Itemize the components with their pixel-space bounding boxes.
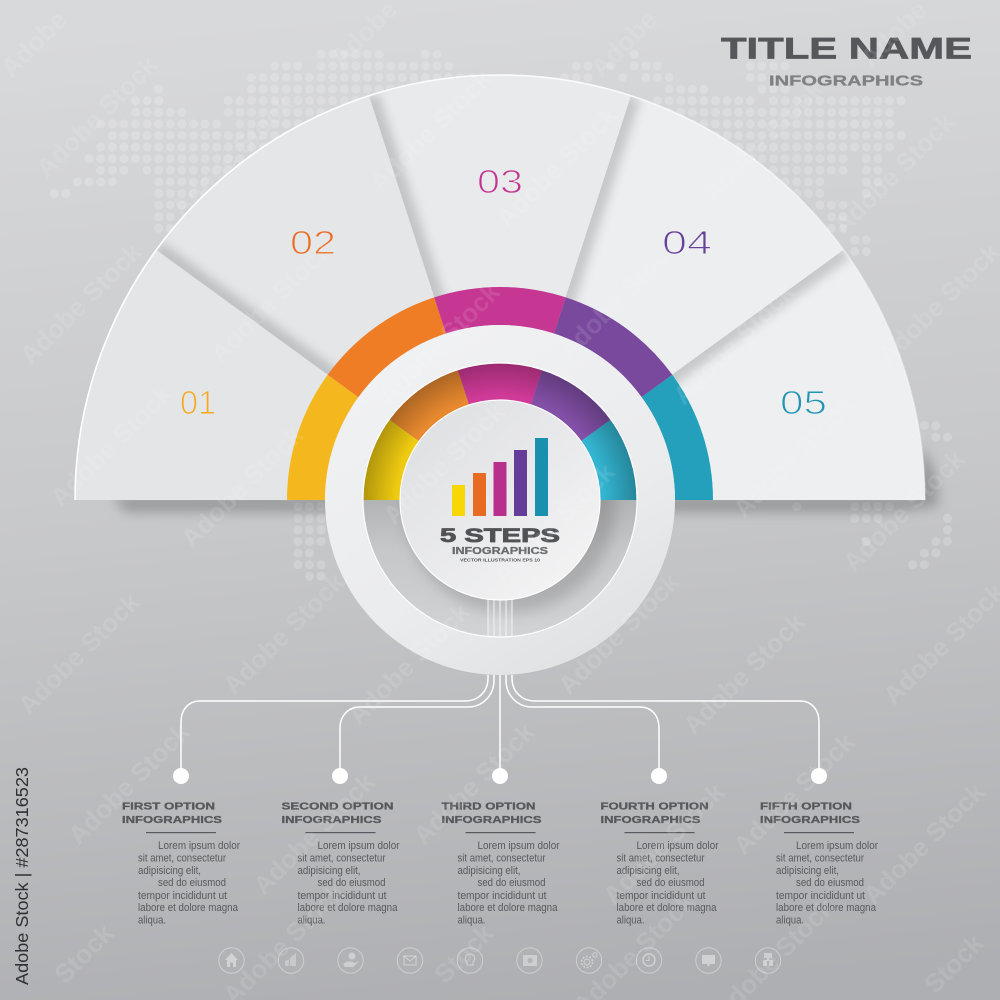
option 5: INFOGRAPHICS [760,815,861,826]
option 5: sed do eiusmod [796,877,864,889]
icon: home [225,953,238,967]
watermark: Adobe Stock [14,236,148,370]
watermark: Adobe Stock [857,776,991,910]
option 2: labore et dolore magna [298,902,398,914]
sector 4 [500,96,844,500]
centre disc [400,400,600,600]
watermark: Adobe Stock [44,378,178,512]
watermark: Adobe Stock [487,456,621,590]
step number 05: 05 [780,384,827,421]
title [721,32,972,90]
centre heading: VECTOR ILLUSTRATION EPS 10 [460,558,540,564]
watermark: Adobe Stock [175,419,309,553]
option 2: INFOGRAPHICS [282,815,382,826]
option 5: tempor incididunt ut [776,890,866,902]
watermark: Adobe Stock [217,566,351,700]
option 5: aliqua. [776,914,804,926]
watermark: Adobe Stock [552,566,686,700]
option 3: INFOGRAPHICS [442,815,542,826]
step number 01: 01 [180,384,216,421]
watermark: Adobe [584,4,663,83]
sector 2 [156,96,500,500]
watermark: Adobe Stock [165,88,299,222]
watermark: Adobe Stock [377,396,511,530]
watermark: Adobe Stock [597,776,731,910]
inner colour ring [363,363,637,500]
option 1: aliqua. [138,914,166,926]
bar chart icon [452,438,548,516]
option 1: tempor incididunt ut [138,890,228,902]
option 2: Lorem ipsum dolor [318,840,400,852]
option 1 [122,802,240,926]
option 3: sed do eiusmod [478,877,546,889]
option 5: adipisicing elit, [776,865,839,877]
option 3: sit amet, consectetur [458,852,546,864]
connector stubs in ring hole [488,598,512,638]
option 3: Lorem ipsum dolor [478,840,560,852]
watermark: Stock [48,918,120,989]
option 5: Lorem ipsum dolor [796,840,878,852]
icon row [219,948,781,973]
option 2: SECOND OPTION [282,802,394,812]
option 4: adipisicing elit, [616,865,680,877]
option 2: sed do eiusmod [318,877,386,889]
watermark: Adobe Stock [827,106,961,240]
watermark: Stock [428,918,500,989]
option 5: labore et dolore magna [776,902,877,914]
icon: envelope [404,956,416,965]
watermark: Adobe Stock [490,99,624,233]
icon: banknote [523,955,537,966]
world map of dots [54,54,948,576]
centre heading [440,525,560,564]
option 2 [282,802,400,926]
watermark: Adobe Stock [342,596,476,730]
centre heading: 5 STEPS [440,525,560,547]
watermark: Adobe Stock [696,73,830,207]
watermark: Adobe Stock [667,276,801,410]
semicircle shadow [112,445,938,512]
stock id vertical label: Adobe Stock | #287316523 [12,767,32,985]
step number 03: 03 [477,163,523,200]
sector 5 [500,250,925,500]
option 4: sit amet, consectetur [616,852,705,864]
sector 3 [369,75,631,500]
option 1: FIRST OPTION [122,802,215,812]
option 3: THIRD OPTION [442,802,536,812]
option 2: sit amet, consectetur [298,852,386,864]
watermark: Adobe Stock [12,586,146,720]
option 5: sit amet, consectetur [776,852,864,864]
option 5: FIFTH OPTION [760,802,852,812]
watermark: Adobe Stock [30,49,164,183]
title: TITLE NAME [721,32,972,66]
sector 1 [75,250,500,500]
option 5 [760,802,878,926]
option 1: Lorem ipsum dolor [158,840,240,852]
big white ring [325,325,675,675]
watermark: Adobe Stock [364,63,498,197]
centre heading: INFOGRAPHICS [452,546,549,557]
option 4 [600,802,719,926]
option dots [173,768,827,784]
option 4: aliqua. [616,914,644,926]
watermark: Adobe Stock [372,276,506,410]
watermark: Adobe Stock [552,231,686,365]
connector lines [181,675,819,776]
icon: org chart [763,953,773,966]
option 1: adipisicing elit, [138,865,201,877]
title: INFOGRAPHICS [769,72,923,90]
icon: speech bubble [702,955,715,967]
option 4: sed do eiusmod [636,877,704,889]
step number 04: 04 [662,224,712,261]
option 1: INFOGRAPHICS [122,815,223,826]
watermark: Adobe Stock [727,726,861,860]
icon: hand with coin [343,952,359,967]
option 2: aliqua. [298,914,326,926]
option 3: tempor incididunt ut [458,890,547,902]
icon: clock [643,954,655,966]
option 3: adipisicing elit, [458,865,520,877]
watermark: Adobe Stock [62,716,196,850]
option 1: sit amet, consectetur [138,852,226,864]
icon: chart [285,953,296,966]
option 4: tempor incididunt ut [616,890,706,902]
option 4: FOURTH OPTION [600,802,708,812]
watermark: Adobe Stock [727,389,861,523]
watermark: Adobe Stock [247,766,381,900]
option 3: aliqua. [458,914,486,926]
watermark: Adobe Stock [677,606,811,740]
icon: gears [582,953,597,968]
option 4: Lorem ipsum dolor [636,840,719,852]
option 2: adipisicing elit, [298,865,360,877]
watermark: Adobe Stock [837,443,971,577]
option 1: sed do eiusmod [158,877,226,889]
option 1: labore et dolore magna [138,902,239,914]
panel: five step semicircle [75,75,925,500]
step number 02: 02 [290,224,336,261]
watermark: Stock [918,928,990,999]
option 4: labore et dolore magna [616,902,717,914]
watermark: Adobe Stock [204,234,338,368]
option 3: labore et dolore magna [458,902,558,914]
option 2: tempor incididunt ut [298,890,387,902]
option 3 [442,802,560,926]
watermark: Adobe Stock [407,716,541,850]
option 4: INFOGRAPHICS [600,815,701,826]
outer colour ring [287,287,713,500]
icon: light bulb [465,954,475,965]
